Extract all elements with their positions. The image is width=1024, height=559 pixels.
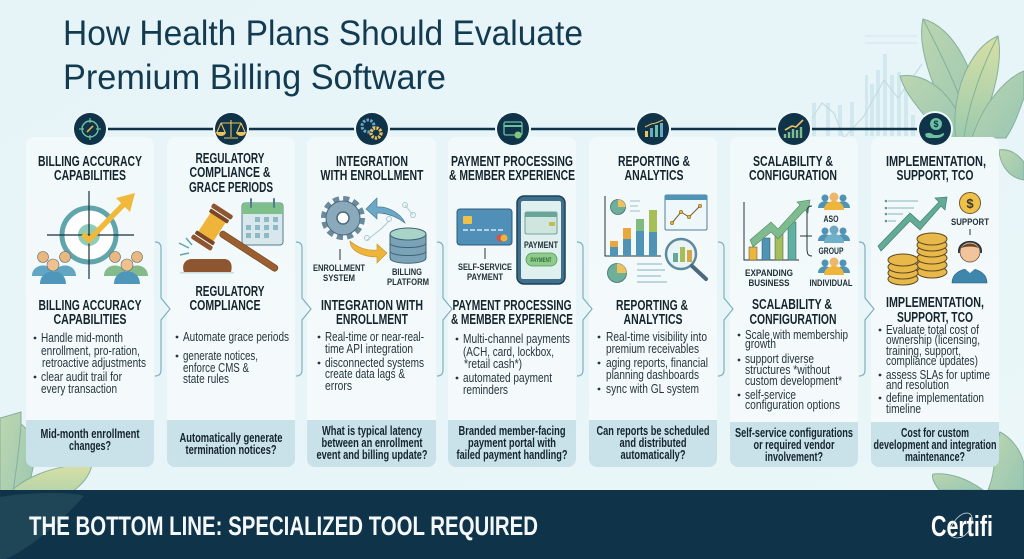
panel: payment processing: Branded member-facing	[458, 424, 566, 438]
panel: scalability and configuration: Scale with membership	[745, 328, 848, 342]
panel: scalability and configuration: CONFIGURATION	[750, 312, 836, 328]
panel: regulatory compliance: GRACE PERIODS	[189, 180, 273, 196]
timeline icon: target	[72, 111, 108, 147]
panel: implementation, support, TCO: IMPLEMENTATION,	[886, 295, 984, 311]
panel: payment processing: failed payment handling?	[456, 448, 568, 462]
panel: integration with enrollment: between an enrollment	[322, 436, 423, 450]
panel: reporting and analytics: Real-time visibility into	[606, 330, 707, 344]
icon: credit card and phone	[457, 196, 565, 284]
panel: billing accuracy: BILLING ACCURACY	[38, 298, 142, 314]
faint background chart	[812, 36, 922, 138]
panel: implementation, support, TCO: SUPPORT, TCO	[897, 310, 973, 326]
panel: scalability and configuration: SCALABILITY &	[753, 154, 833, 170]
timeline icon: gears	[354, 111, 390, 147]
panel: payment processing: & MEMBER EXPERIENCE	[451, 312, 573, 328]
panel: reporting and analytics: ANALYTICS	[624, 312, 683, 328]
panel: payment processing	[448, 137, 576, 467]
icon: gavel	[179, 203, 289, 287]
arrow connectors between cards	[155, 242, 874, 376]
panel: implementation, support, TCO: maintenance?	[905, 450, 965, 464]
timeline icon: growth	[776, 111, 812, 147]
panel: regulatory compliance: REGULATORY	[196, 151, 265, 167]
panel: integration with enrollment: create data lags &	[325, 367, 406, 381]
panel: integration with enrollment: What is typical latency	[322, 424, 422, 438]
icon: growth chart and member groups: BUSINESS	[748, 278, 790, 289]
timeline icon: money in hand: $	[933, 119, 939, 129]
panel: payment processing: *retail cash*)	[464, 357, 522, 371]
panel: integration with enrollment: INTEGRATION	[336, 154, 408, 170]
panel: payment processing: automated payment	[463, 371, 552, 385]
icon: growth chart and member groups	[744, 192, 853, 289]
icon: charts and magnifier	[605, 195, 707, 282]
panel: integration with enrollment: event and billing update?	[316, 448, 428, 462]
panel: implementation, support, TCO	[871, 137, 999, 467]
panel: integration with enrollment: ENROLLMENT	[336, 312, 408, 328]
panel: reporting and analytics: aging reports, financial	[606, 356, 708, 370]
leaf overlay on banner	[0, 493, 84, 559]
panel: implementation, support, TCO: training, support,	[886, 344, 961, 358]
panel: implementation, support, TCO: define implementation	[886, 391, 984, 405]
panel: regulatory compliance: COMPLIANCE &	[190, 165, 271, 181]
logo: Certifi: Certifi	[931, 511, 993, 543]
panel: billing accuracy: enrollment, pro-ration,	[41, 344, 140, 358]
timeline icon: payment card	[495, 111, 531, 147]
panel: billing accuracy: Mid-month enrollment	[40, 427, 140, 441]
panel: implementation, support, TCO: Evaluate total cost of	[886, 323, 979, 337]
icon: gear, database and arrows: BILLING	[392, 267, 422, 278]
timeline icon: money in hand	[917, 111, 953, 147]
panel: billing accuracy: CAPABILITIES	[54, 168, 126, 184]
panel: billing accuracy: every transaction	[41, 382, 117, 396]
bottom banner	[0, 490, 1024, 559]
panel: billing accuracy: CAPABILITIES	[54, 312, 127, 328]
panel: billing accuracy: Handle mid-month	[41, 331, 123, 345]
panel: integration with enrollment: time API integration	[325, 342, 413, 356]
panel: scalability and configuration: self-service	[745, 388, 796, 402]
panel: integration with enrollment: Real-time or near-real-	[325, 330, 424, 344]
panel: scalability and configuration: configuration options	[745, 398, 840, 412]
panel: implementation, support, TCO: assess SLAs for uptime	[886, 368, 990, 382]
panel: reporting and analytics: REPORTING &	[616, 298, 688, 314]
panel: scalability and configuration: involvement?	[765, 450, 823, 464]
icon: gear, database and arrows: SYSTEM	[323, 273, 355, 284]
panel: scalability and configuration: growth	[745, 337, 776, 351]
panel: implementation, support, TCO: IMPLEMENTATION,	[886, 154, 986, 170]
panel: scalability and configuration: SCALABILITY &	[752, 297, 832, 313]
panel: implementation, support, TCO: compliance updates)	[886, 354, 978, 368]
decorative leaves: top right	[900, 19, 1024, 180]
panel: payment processing: Multi-channel payments	[463, 332, 570, 346]
panel: payment processing: PAYMENT PROCESSING	[452, 298, 572, 314]
panel: scalability and configuration: CONFIGURATION	[749, 168, 837, 184]
icon: gear, database and arrows	[313, 198, 429, 288]
icon: target with arrow and people	[32, 191, 148, 284]
panel: integration with enrollment: errors	[325, 379, 352, 393]
icon: credit card and phone: PAYMENT	[524, 240, 558, 251]
panel: payment processing: & MEMBER EXPERIENCE	[449, 168, 575, 184]
icon: growth arrow, coins and support agent	[878, 192, 989, 285]
panel: scalability and configuration: or required vendor	[754, 438, 835, 452]
icon: growth chart and member groups: EXPANDING	[745, 268, 793, 279]
banner heading: THE BOTTOM LINE: SPECIALIZED TOOL REQUIRED	[29, 511, 538, 541]
panel: billing accuracy: clear audit trail for	[41, 370, 122, 384]
panel: scalability and configuration: structures *without	[745, 363, 830, 377]
timeline connector	[108, 128, 917, 130]
panel: implementation, support, TCO: Cost for custom	[901, 426, 969, 440]
panel: reporting and analytics: sync with GL system	[606, 382, 699, 396]
panel: billing accuracy: BILLING ACCURACY	[38, 154, 142, 170]
panel: payment processing: PAYMENT PROCESSING	[451, 154, 573, 170]
panel: reporting and analytics: premium receivables	[606, 342, 699, 356]
panel: reporting and analytics: and distributed	[620, 436, 686, 450]
panel: regulatory compliance: REGULATORY	[196, 284, 265, 300]
panel: regulatory compliance: termination notices?	[186, 443, 276, 457]
panel: reporting and analytics: ANALYTICS	[624, 168, 684, 184]
icon: growth chart and member groups: INDIVIDUAL	[810, 278, 853, 289]
panel: reporting and analytics	[589, 137, 717, 467]
panel: scalability and configuration: custom development*	[745, 374, 842, 388]
panel: regulatory compliance	[167, 137, 295, 467]
icon: growth chart and member groups: GROUP	[818, 246, 844, 257]
title: How Health Plans Should Evaluate	[63, 14, 583, 53]
timeline icon: bar chart	[635, 111, 671, 147]
panel: regulatory compliance: generate notices,	[183, 349, 258, 363]
decorative leaves: bottom right	[932, 432, 1024, 490]
panel: reporting and analytics: planning dashboards	[606, 368, 699, 382]
decorative leaves: bottom left	[0, 412, 92, 532]
panel: regulatory compliance: Automate grace periods	[183, 330, 289, 344]
panel: integration with enrollment: WITH ENROLLMENT	[320, 168, 424, 184]
panel: integration with enrollment: disconnected systems	[325, 356, 424, 370]
panel: payment processing: reminders	[463, 383, 508, 397]
panel: scalability and configuration: Self-service configurations	[735, 426, 853, 440]
panel: billing accuracy	[26, 137, 154, 467]
panel: regulatory compliance: COMPLIANCE	[190, 298, 261, 314]
panel: implementation, support, TCO: ownership (licensing,	[886, 333, 980, 347]
panel: implementation, support, TCO: and resolution	[886, 378, 949, 392]
icon: credit card and phone: PAYMENT	[467, 272, 503, 283]
panel: payment processing: (ACH, card, lockbox,	[463, 345, 554, 359]
panel: regulatory compliance: Automatically generate	[180, 431, 283, 445]
icon: credit card and phone: SELF-SERVICE	[458, 262, 512, 273]
panel: scalability and configuration: support diverse	[745, 352, 814, 366]
panel: integration with enrollment	[307, 137, 436, 467]
icon: gear, database and arrows: PLATFORM	[387, 277, 429, 288]
timeline icon: scales	[213, 111, 249, 147]
panel: reporting and analytics: REPORTING &	[618, 154, 690, 170]
panel: implementation, support, TCO: timeline	[886, 402, 921, 416]
icon: growth chart and member groups: ASO	[824, 214, 838, 225]
panel: reporting and analytics: Can reports be scheduled	[596, 424, 710, 438]
icon: calendar	[242, 199, 283, 245]
title: Premium Billing Software	[63, 58, 446, 97]
panel: billing accuracy: changes?	[69, 439, 111, 453]
panel: reporting and analytics: automatically?	[620, 448, 686, 462]
icon: growth arrow, coins and support agent: $	[966, 196, 974, 211]
title	[63, 14, 583, 97]
panel: regulatory compliance: enforce CMS &	[183, 361, 250, 375]
icon: gear, database and arrows: ENROLLMENT	[313, 263, 365, 274]
panel: billing accuracy: retroactive adjustments	[42, 356, 146, 370]
panel: regulatory compliance: state rules	[183, 372, 229, 386]
panel: integration with enrollment: INTEGRATION WITH	[321, 298, 423, 314]
icon: growth arrow, coins and support agent: SUPPORT	[951, 217, 989, 228]
icon: credit card and phone: PAYMENT	[530, 257, 552, 264]
panel: payment processing: payment portal with	[468, 436, 556, 450]
panel: implementation, support, TCO: SUPPORT, TCO	[896, 168, 974, 184]
panel: scalability and configuration	[730, 137, 858, 467]
